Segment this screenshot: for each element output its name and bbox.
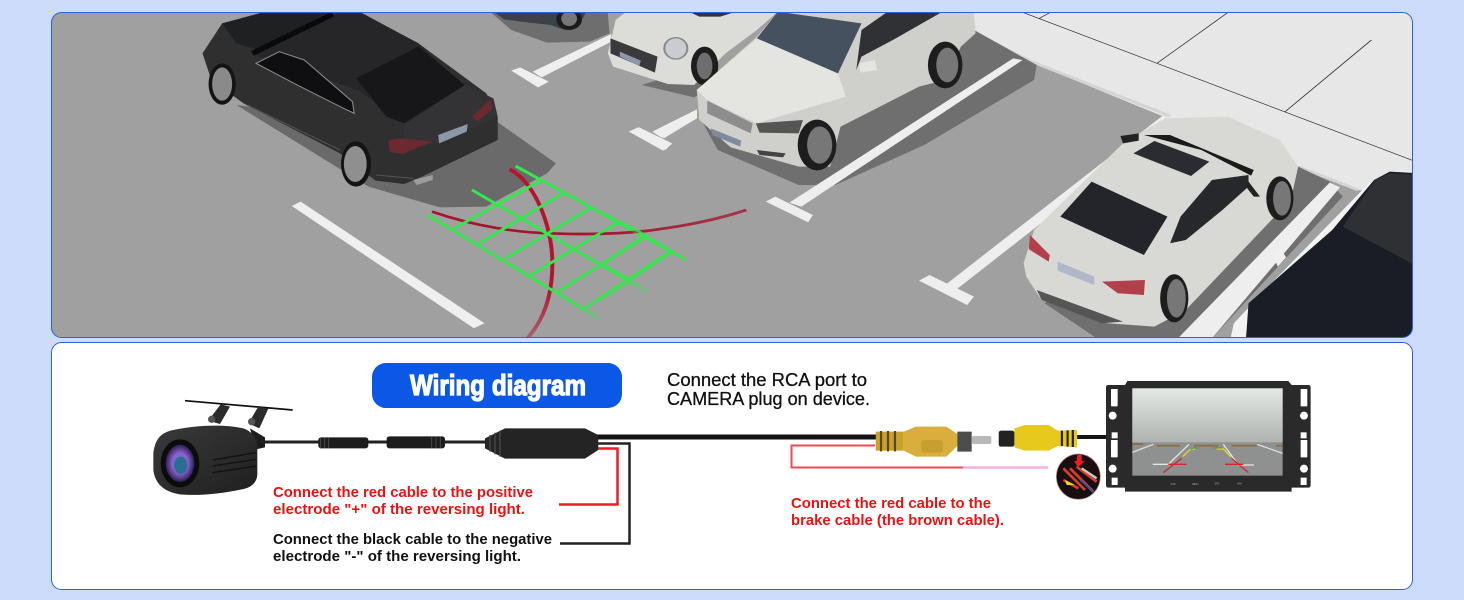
wire: red cable to brake [792, 446, 963, 468]
panel: wiring diagram [52, 342, 1412, 590]
green and red guide tail [600, 210, 746, 300]
text: red cable to brake cable [791, 495, 1004, 529]
parking stripes [629, 58, 1340, 338]
text: red cable to brake cable: brake cable (the brown cable). [791, 512, 1004, 529]
heading pill: Wiring diagram [410, 370, 586, 402]
text: RCA port instruction: Connect the RCA port to [667, 370, 867, 390]
shadows [642, 30, 1343, 338]
button labels [1171, 482, 1242, 486]
red curved guide [510, 169, 552, 338]
text: black cable to negative electrode: electrode "-" of the reversing light. [273, 548, 521, 565]
female yellow plug [999, 425, 1077, 451]
wire: pink section of brake cable [963, 466, 1048, 469]
white SUV [697, 12, 976, 170]
male yellow plug [876, 427, 991, 457]
mounting bracket holes [1109, 389, 1308, 485]
button labels: SRC [1215, 483, 1220, 485]
screen [1132, 388, 1283, 476]
button labels: PCB [1171, 484, 1176, 486]
wire: red cable to reversing light [559, 448, 618, 504]
dark car at right edge [1230, 172, 1421, 340]
RCA plugs [876, 425, 1077, 457]
panel: parking lot photo [52, 9, 1421, 340]
text: RCA port instruction [667, 370, 870, 409]
text: red cable to positive electrode: Connect the red cable to the positive [273, 484, 533, 501]
shadow of dark sedan [236, 105, 556, 207]
wire: black cable to reversing light [560, 444, 630, 544]
parking scene, left side [202, 9, 746, 338]
dark sedan [202, 13, 498, 187]
white mini car [608, 12, 778, 85]
inline connectors [318, 436, 445, 448]
reversing guide lines [427, 166, 746, 338]
text: black cable to negative electrode: Connect the black cable to the negative [273, 531, 552, 548]
button labels: MENU [1192, 484, 1199, 486]
heading pill [372, 363, 622, 408]
text: red cable to brake cable: Connect the red cable to the [791, 495, 991, 512]
control box [485, 428, 598, 459]
sidewalk [974, 10, 1421, 200]
small dark car at top [492, 13, 610, 43]
parking scene, right side [600, 10, 1421, 340]
text: black cable to negative electrode [273, 531, 552, 565]
text: red cable to positive electrode [273, 484, 533, 518]
main cables [263, 437, 1110, 442]
white sedan [1024, 117, 1298, 327]
backup camera [153, 401, 293, 495]
green grid [427, 166, 686, 318]
text: RCA port instruction: CAMERA plug on device. [667, 389, 870, 409]
car stereo monitor [1106, 381, 1311, 492]
parking stripes [292, 34, 697, 328]
wiring harness inset [1056, 454, 1100, 499]
button labels: NAV [1237, 482, 1242, 485]
text: red cable to positive electrode: electrode "+" of the reversing light. [273, 501, 525, 518]
